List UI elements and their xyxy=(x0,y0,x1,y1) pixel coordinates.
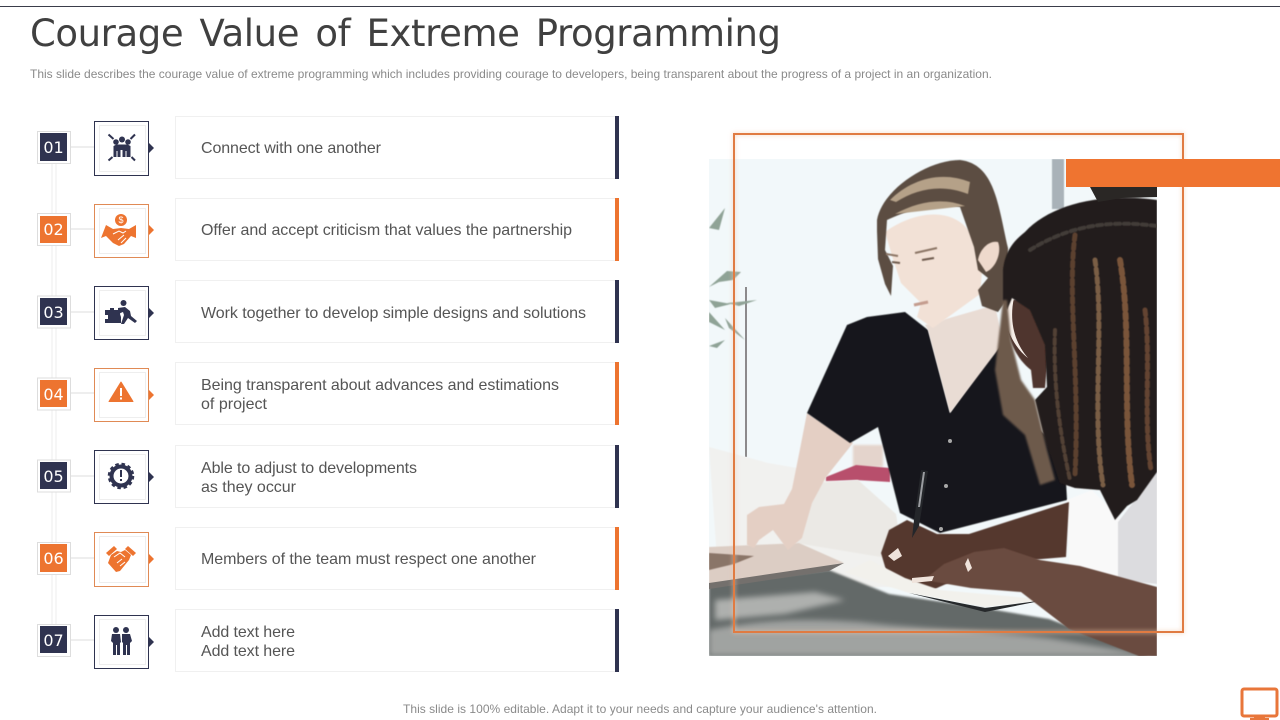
man's neck xyxy=(925,305,1003,413)
text box xyxy=(176,280,619,343)
woman's second hand and forearm xyxy=(924,548,1157,656)
row 1 xyxy=(38,116,619,179)
text box: of project xyxy=(201,396,268,413)
arrow xyxy=(149,308,154,318)
arrow xyxy=(149,472,154,482)
icon: handshake xyxy=(94,532,148,586)
text box: Add text here xyxy=(201,643,295,660)
arrow xyxy=(149,225,154,235)
pink fabric xyxy=(853,445,883,467)
icon: two people xyxy=(94,616,148,668)
text box: Being transparent about advances and estimations xyxy=(201,377,559,394)
shirt buttons xyxy=(939,439,952,531)
text box: Add text here xyxy=(201,624,295,641)
title: Courage Value of Extreme Programming xyxy=(30,12,781,55)
icon: people with arrows xyxy=(94,122,148,176)
decorative frame around photo xyxy=(734,134,1183,632)
woman's top xyxy=(1066,499,1068,501)
arrow xyxy=(149,637,154,647)
row 2 xyxy=(38,198,619,261)
arrow xyxy=(149,390,154,400)
notebook xyxy=(884,567,1032,606)
man's arm and hand xyxy=(747,413,853,550)
text box xyxy=(176,362,619,425)
text box: as they occur xyxy=(201,479,297,496)
woman's writing arm and hand xyxy=(881,502,1069,592)
photo: two people working at a table xyxy=(709,159,1157,659)
pen xyxy=(912,470,928,538)
man's face xyxy=(885,214,983,328)
row 4 xyxy=(38,362,619,425)
paper on table xyxy=(796,480,901,557)
row 5 xyxy=(38,445,619,508)
man's shirt xyxy=(807,312,1067,533)
number badge 05 xyxy=(38,460,70,492)
text box: Connect with one another xyxy=(201,140,382,157)
subtitle text: This slide describes the courage value of extreme programming which includes providing courage to developers, being transparent about the progress of a project in an organization. xyxy=(30,67,992,81)
man's hair xyxy=(877,160,1008,312)
number badge 07 xyxy=(38,624,70,656)
row 6 xyxy=(38,527,619,590)
woman's face xyxy=(1008,299,1047,389)
text box xyxy=(176,527,619,590)
number badge 07: 07 xyxy=(43,631,64,650)
row 3 xyxy=(38,280,619,343)
text box: Members of the team must respect one another xyxy=(201,551,537,568)
number badge 03: 03 xyxy=(43,303,64,322)
text box xyxy=(176,445,619,508)
text box: Offer and accept criticism that values the partnership xyxy=(201,222,572,239)
number badge 01 xyxy=(38,132,70,164)
number badge 05: 05 xyxy=(43,467,64,486)
icon: warning triangle xyxy=(94,368,148,422)
icon: handshake with coin xyxy=(94,204,148,258)
icon: monitor xyxy=(1242,689,1277,720)
icon: person pushing puzzle xyxy=(94,286,148,340)
plant xyxy=(709,208,757,348)
arrow xyxy=(149,143,154,153)
number badge 04 xyxy=(38,378,70,410)
timeline vertical rail xyxy=(52,160,56,628)
icon: gear with exclamation xyxy=(94,450,148,504)
number badge 06: 06 xyxy=(43,549,64,568)
number badge 01: 01 xyxy=(43,138,64,157)
row 7 xyxy=(38,609,619,672)
text box: Work together to develop simple designs and solutions xyxy=(201,305,586,322)
tabletop xyxy=(709,570,1157,659)
man's facial features xyxy=(886,248,937,305)
laptop xyxy=(709,542,844,583)
text box xyxy=(176,609,619,672)
number badge 06 xyxy=(38,542,70,574)
text box: Able to adjust to developments xyxy=(201,460,417,477)
woman's side strand xyxy=(995,300,1055,485)
text box xyxy=(176,116,619,179)
icon: handshake with coin: $ xyxy=(118,215,124,225)
text box xyxy=(176,198,619,261)
number badge 03 xyxy=(38,296,70,328)
left table and backdrop xyxy=(710,448,886,586)
woman's hair xyxy=(1003,198,1157,520)
arrow xyxy=(149,554,154,564)
number badge 04: 04 xyxy=(43,385,64,404)
footer note: This slide is 100% editable. Adapt it to your needs and capture your audience's attention. xyxy=(403,702,877,716)
number badge 02 xyxy=(38,214,70,246)
number badge 02: 02 xyxy=(43,220,64,239)
orange accent bar xyxy=(1066,159,1280,187)
